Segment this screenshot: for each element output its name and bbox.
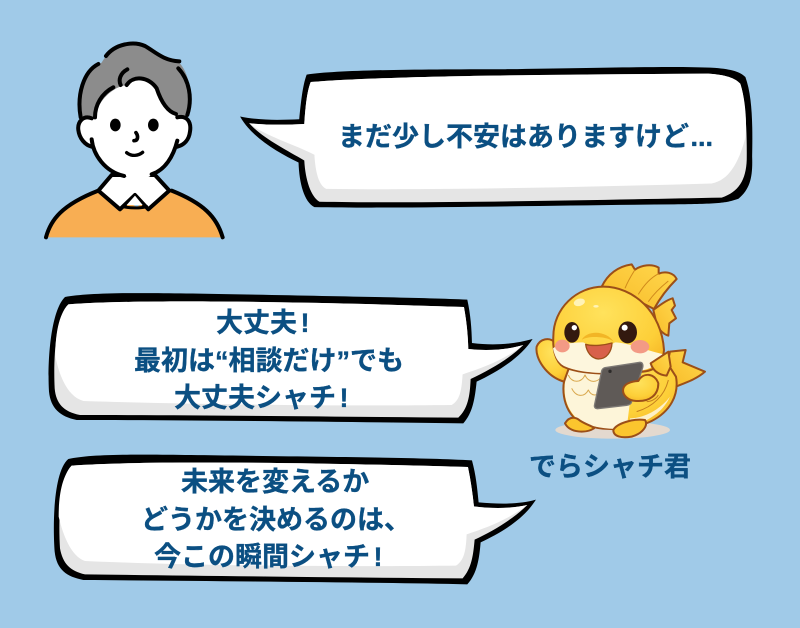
side fin xyxy=(653,298,676,336)
tablet xyxy=(594,362,643,409)
text: reassurance message: 大丈夫! xyxy=(216,308,310,338)
icon: man with orange sweater xyxy=(46,44,223,237)
bubble shape xyxy=(49,293,533,423)
text: reassurance message: 大丈夫シャチ! xyxy=(174,383,348,413)
small fin xyxy=(651,352,671,376)
top fin xyxy=(602,264,677,309)
body xyxy=(563,352,677,429)
bubble shape xyxy=(240,67,752,208)
text: reassurance message: 最初は“相談だけ”でも xyxy=(134,346,404,376)
feet xyxy=(565,418,594,432)
text: decision message: 未来を変えるか xyxy=(181,467,369,497)
bubble shape xyxy=(54,455,536,584)
tail fin xyxy=(667,350,705,386)
text: reassurance message xyxy=(134,308,404,413)
text: decision message: 今この瞬間シャチ! xyxy=(154,542,382,572)
speech bubble: worry xyxy=(240,67,752,208)
holding arm xyxy=(623,375,658,401)
text: decision message: どうかを決めるのは、 xyxy=(141,505,411,535)
speech bubble: reassurance xyxy=(49,293,533,423)
speech bubble: decision xyxy=(54,455,536,584)
text: decision message xyxy=(141,467,411,572)
icon: golden orca mascot xyxy=(536,264,705,439)
text: worry message: まだ少し不安はありますけど... xyxy=(338,122,713,152)
label: mascot name: でらシャチ君 xyxy=(529,452,691,482)
raised arm xyxy=(536,339,570,382)
head xyxy=(553,287,664,374)
